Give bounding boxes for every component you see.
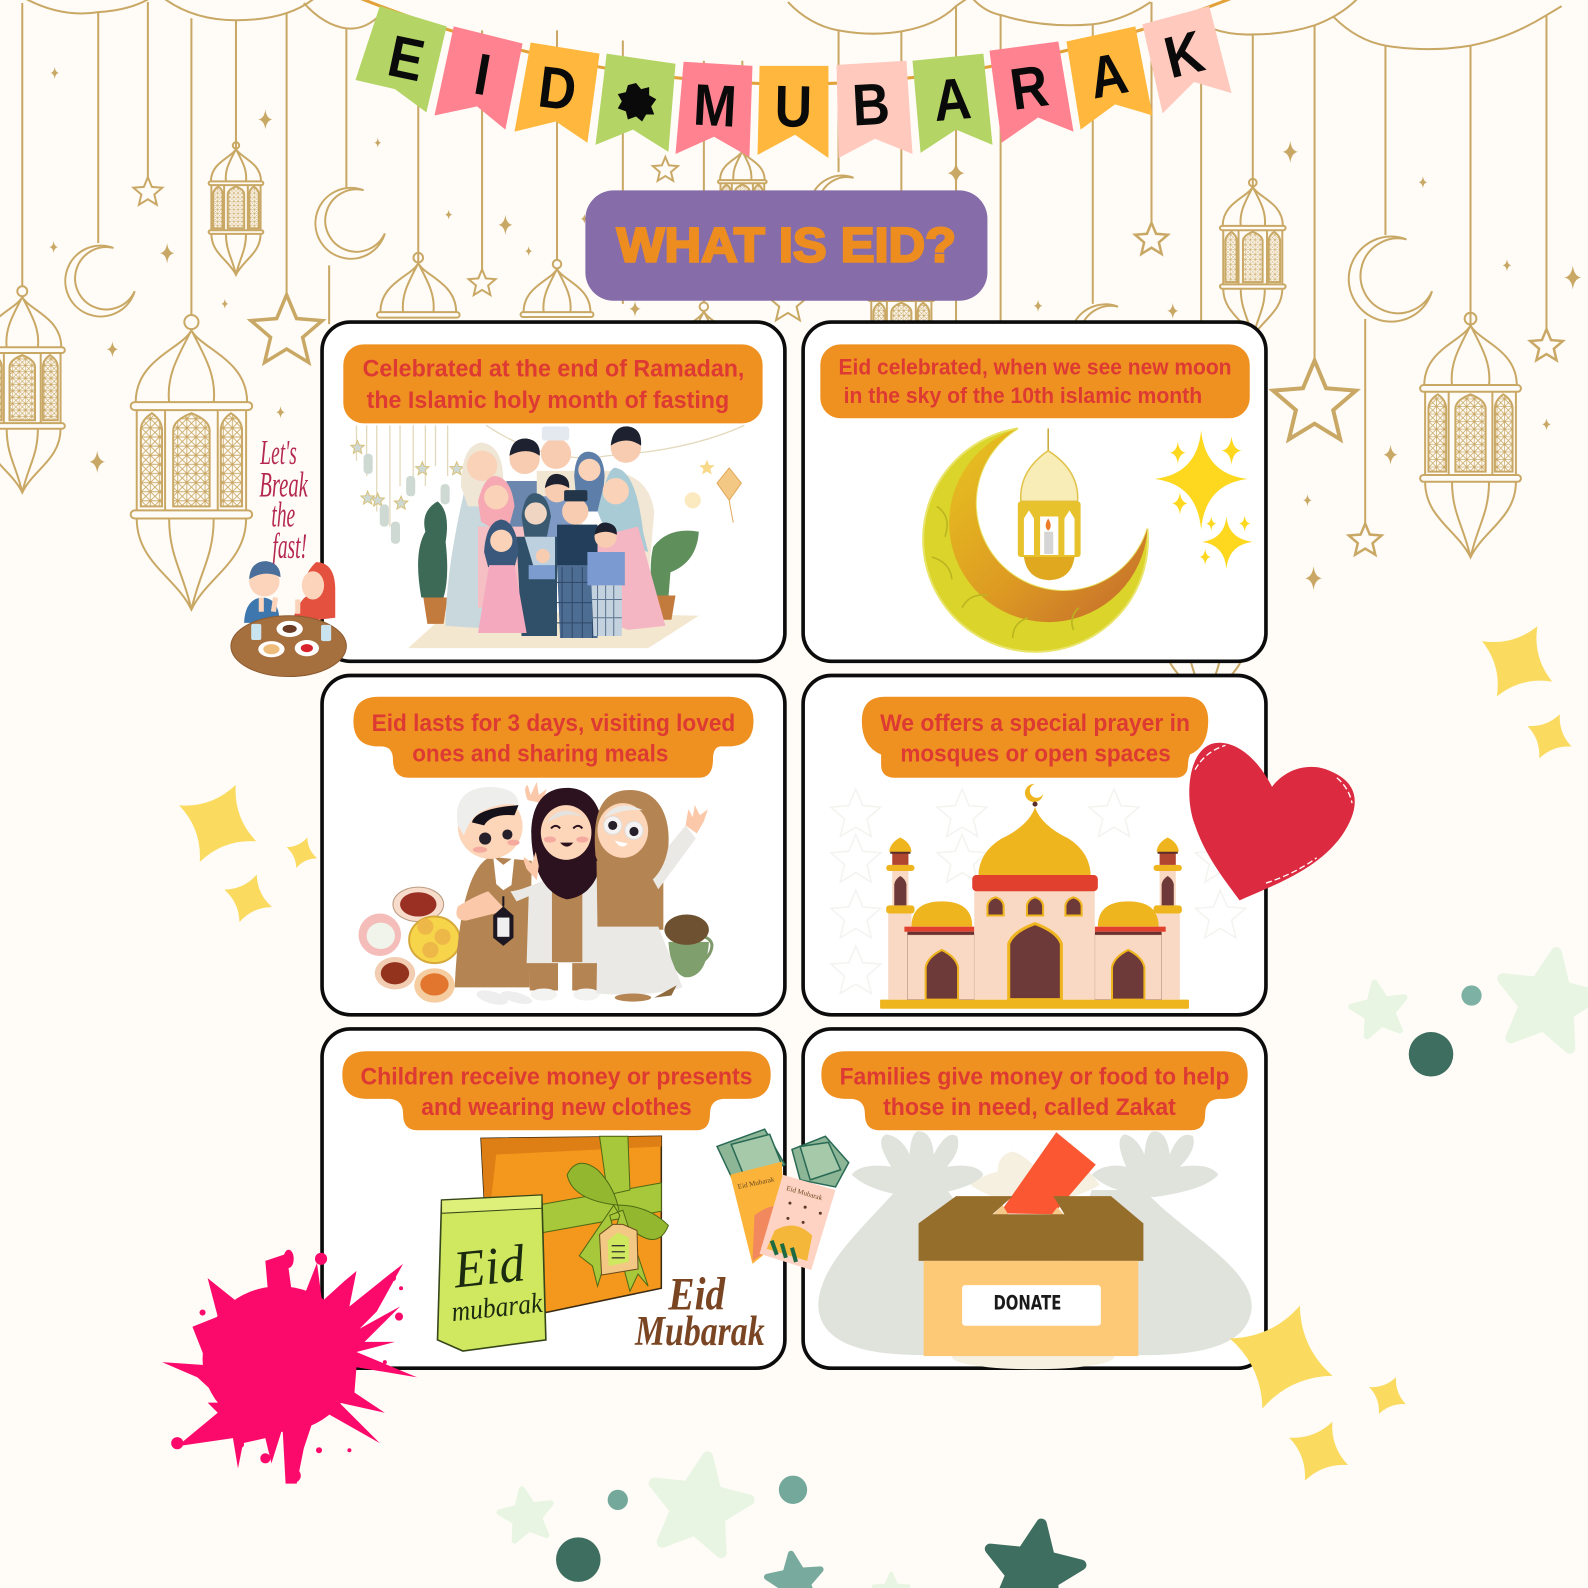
sticker: pink paint splat [162, 1250, 417, 1484]
panel: three days of visiting [322, 676, 785, 1015]
label: special prayer: We offers a special prayer in [880, 710, 1190, 737]
label: new moon: Eid celebrated, when we see new moon [839, 355, 1232, 380]
panel: new moon [803, 322, 1266, 661]
label: gifts for children: Children receive money or presents [361, 1064, 752, 1091]
illustration: friends and food [359, 782, 712, 1008]
donate tag [962, 1285, 1101, 1326]
decorative large yellow star over panel [1211, 1287, 1351, 1427]
illustration: donation box and sacks [818, 1131, 1252, 1369]
title banner: EID MUBARAK: K [1158, 18, 1210, 91]
text: Let's Break the fast: fast! [272, 527, 307, 567]
label: three days of visiting [353, 697, 753, 778]
illustration: gift box and bag [438, 1136, 765, 1355]
back row adults [446, 476, 511, 630]
panel: zakat [803, 1029, 1266, 1369]
title banner: EID MUBARAK: E [383, 22, 430, 94]
title banner: EID MUBARAK: D [535, 53, 580, 123]
panel: special prayer [803, 676, 1266, 1015]
title banner: EID MUBARAK: A [931, 65, 974, 134]
heading pill: What is Eid?: WHAT IS EID? [617, 218, 956, 272]
title banner: EID MUBARAK: A [1084, 40, 1133, 111]
decorative yellow stars and green shapes [161, 606, 1588, 1588]
sticker: children breaking the fast [231, 434, 346, 677]
label: gifts for children [342, 1051, 771, 1130]
illustration: gift box and bag: Eid [450, 1234, 528, 1299]
label: zakat: Families give money or food to help [840, 1064, 1229, 1091]
text: Eid Mubarak lettering: Eid [668, 1268, 726, 1320]
label: three days of visiting: ones and sharing meals [412, 741, 668, 768]
title banner: EID MUBARAK: U [774, 73, 813, 140]
label: end of Ramadan [343, 344, 763, 423]
label: zakat [821, 1051, 1248, 1130]
text: Let's Break the fast: the [271, 495, 295, 535]
text: Eid Mubarak lettering: Mubarak [634, 1308, 765, 1355]
text: Let's Break the fast: Let's [260, 434, 297, 473]
label: zakat: those in need, called Zakat [883, 1094, 1176, 1121]
panel: end of Ramadan [322, 322, 785, 661]
front row [557, 525, 598, 567]
donate tag: DONATE [994, 1291, 1061, 1314]
middle row [478, 527, 537, 608]
sticker: money envelopes [717, 1129, 849, 1270]
heading pill: What is Eid? [585, 190, 987, 301]
label: special prayer: mosques or open spaces [900, 741, 1171, 768]
title banner: EID MUBARAK: B [851, 71, 891, 138]
label: gifts for children: and wearing new clothes [421, 1094, 692, 1121]
sticker: money envelopes: Eid Mubarak [737, 1175, 776, 1191]
illustration: family gathering [351, 425, 744, 648]
label: end of Ramadan: Celebrated at the end of Ramadan, [363, 356, 744, 383]
sparkles [49, 67, 1581, 590]
illustration: gift box and bag: mubarak [450, 1288, 544, 1328]
label: end of Ramadan: the Islamic holy month of fasting [367, 387, 729, 414]
sticker: money envelopes: Eid Mubarak [785, 1184, 824, 1202]
label: special prayer [862, 697, 1208, 778]
title banner: EID MUBARAK [354, 0, 1238, 158]
title banner: EID MUBARAK: M [692, 71, 738, 139]
label: new moon [820, 344, 1250, 418]
hanging gold decorations [0, 0, 1563, 708]
text: Eid Mubarak lettering [634, 1268, 765, 1355]
sticker: red heart [1189, 743, 1355, 900]
label: three days of visiting: Eid lasts for 3 days, visiting loved [372, 710, 735, 737]
illustration: mosque [831, 784, 1245, 1009]
text: Let's Break the fast [259, 434, 308, 567]
panel: gifts for children [322, 1029, 785, 1368]
text: Let's Break the fast: Break [259, 465, 308, 505]
illustration: crescent moon and lantern [923, 428, 1253, 652]
title banner: EID MUBARAK: R [1006, 52, 1052, 123]
label: new moon: in the sky of the 10th islamic month [844, 383, 1202, 408]
title banner: EID MUBARAK: I [470, 41, 495, 108]
